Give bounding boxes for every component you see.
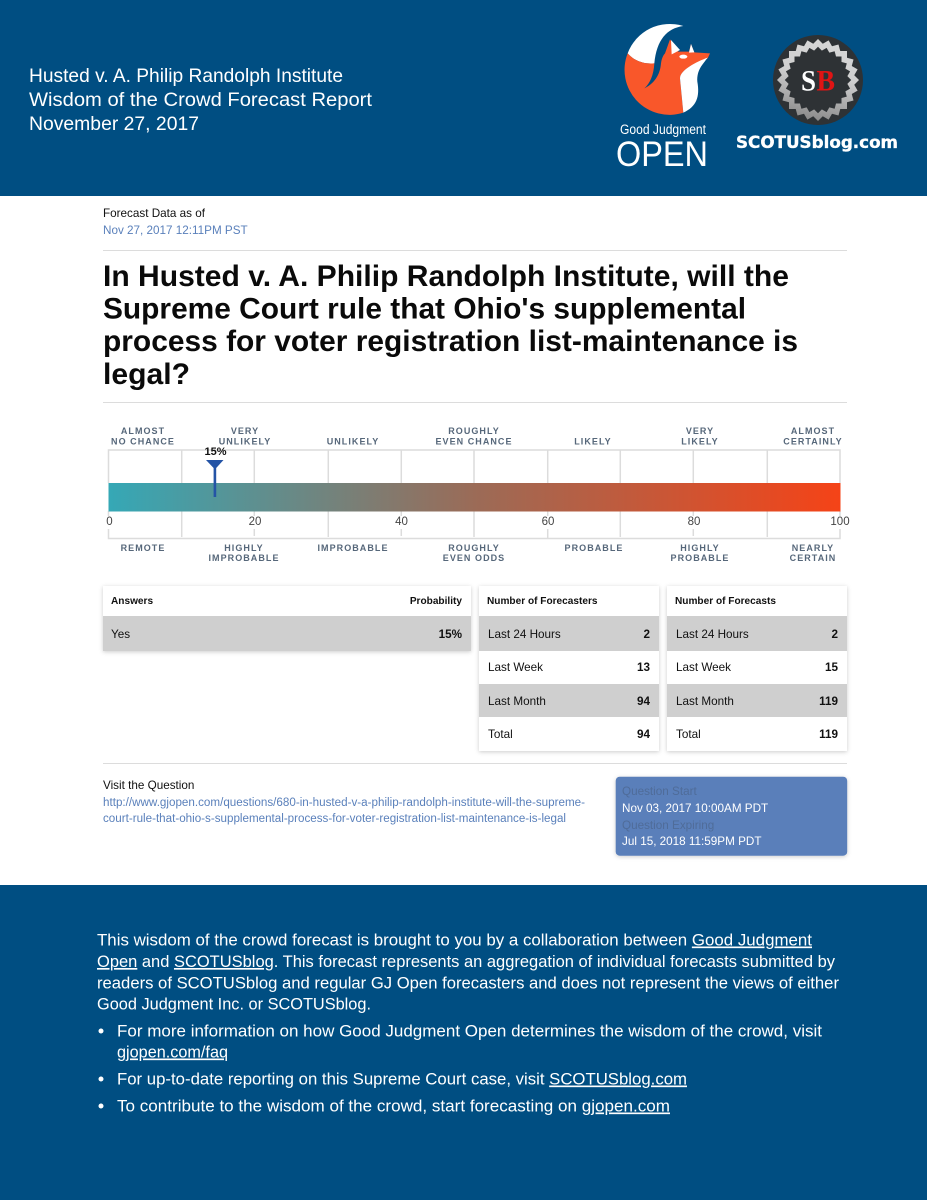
table: number of forecasters: Last 24 Hours bbox=[488, 628, 561, 641]
table: number of forecasts: Last Week bbox=[676, 661, 731, 674]
logo: SCOTUSblog seal bbox=[736, 32, 898, 153]
table: answers: Yes bbox=[111, 628, 130, 641]
forecast date block bbox=[103, 207, 248, 237]
scale numbers: 0 bbox=[106, 516, 113, 528]
header title text bbox=[29, 66, 373, 135]
gauge upper labels: LIKELY bbox=[681, 436, 719, 446]
gauge lower labels: HIGHLY bbox=[224, 543, 264, 553]
table: number of forecasts: 2 bbox=[831, 628, 838, 641]
scale numbers: 40 bbox=[395, 516, 408, 528]
table: number of forecasts bbox=[667, 586, 847, 751]
table: number of forecasters: Number of Forecasters bbox=[487, 596, 598, 607]
scale numbers: 100 bbox=[830, 516, 850, 528]
table: answers: Answers bbox=[111, 596, 153, 607]
question link block: court-rule-that-ohio-s-supplemental-process-for-voter-registration-list-maintenance-is-legal bbox=[103, 813, 566, 825]
gauge upper labels bbox=[111, 426, 843, 446]
table: number of forecasts: 15 bbox=[825, 661, 838, 674]
logo: Good Judgment Open fox bbox=[616, 24, 710, 174]
panel: question dates: Question Expiring bbox=[622, 819, 714, 832]
header title text: November 27, 2017 bbox=[29, 114, 199, 135]
panel: header banner bbox=[0, 0, 927, 196]
question link block: Visit the Question bbox=[103, 779, 194, 792]
logo: SCOTUSblog seal: S bbox=[801, 64, 816, 98]
footer bullet list: To contribute to the wisdom of the crowd, start forecasting on gjopen.com bbox=[117, 1096, 670, 1116]
gauge lower labels: REMOTE bbox=[121, 543, 165, 553]
marker: 15%: 15% bbox=[204, 446, 227, 458]
panel: question dates: Jul 15, 2018 11:59PM PDT bbox=[622, 835, 761, 848]
question heading: process for voter registration list-maintenance is bbox=[103, 325, 798, 358]
gauge lower labels: NEARLY bbox=[792, 543, 834, 553]
table: number of forecasters: Total bbox=[488, 728, 513, 741]
forecast date block: Nov 27, 2017 12:11PM PST bbox=[103, 224, 248, 237]
gauge lower labels: ROUGHLY bbox=[448, 543, 500, 553]
gauge lower labels: IMPROBABLE bbox=[318, 543, 388, 553]
logo: SCOTUSblog seal: B bbox=[816, 64, 835, 98]
panel: footer bbox=[0, 885, 927, 1200]
table: number of forecasters: 94 bbox=[637, 728, 650, 741]
scale numbers: 80 bbox=[688, 516, 700, 528]
gauge upper labels: ROUGHLY bbox=[448, 426, 500, 436]
chart: probability gauge bbox=[102, 426, 852, 563]
table: number of forecasts: Last Month bbox=[676, 695, 734, 708]
gauge upper labels: VERY bbox=[231, 426, 259, 436]
scale numbers: 20 bbox=[249, 516, 261, 528]
gauge upper labels: LIKELY bbox=[574, 436, 612, 446]
table: number of forecasters: Last Week bbox=[488, 661, 543, 674]
panel: question dates bbox=[616, 777, 847, 856]
gauge lower labels: PROBABLE bbox=[565, 543, 623, 553]
footer paragraph: This wisdom of the crowd forecast is brought to you by a collaboration between Good Judgment bbox=[97, 930, 812, 950]
gauge upper labels: ALMOST bbox=[121, 426, 165, 436]
panel: question dates: Nov 03, 2017 10:00AM PDT bbox=[622, 802, 768, 815]
table: answers bbox=[103, 586, 471, 651]
table: number of forecasts: 119 bbox=[819, 695, 838, 708]
table: number of forecasts: Number of Forecasts bbox=[675, 596, 776, 607]
panel: question dates: Question Start bbox=[622, 785, 697, 798]
footer bullet list bbox=[98, 1022, 822, 1116]
gauge upper labels: NO CHANCE bbox=[111, 436, 175, 446]
table: answers: 15% bbox=[439, 628, 463, 641]
gauge lower labels: PROBABLE bbox=[671, 553, 729, 563]
header title text: Husted v. A. Philip Randolph Institute bbox=[29, 66, 343, 87]
gauge lower labels: EVEN ODDS bbox=[443, 553, 505, 563]
footer paragraph: Open and SCOTUSblog. This forecast represents an aggregation of individual forecasts submitted by bbox=[97, 952, 836, 971]
table: number of forecasts: 119 bbox=[819, 728, 838, 741]
header title text: Wisdom of the Crowd Forecast Report bbox=[29, 90, 373, 111]
gradient bar bbox=[108, 483, 840, 512]
scale numbers bbox=[102, 516, 852, 529]
gauge lower labels: IMPROBABLE bbox=[208, 553, 280, 563]
footer paragraph: Good Judgment Inc. or SCOTUSblog. bbox=[97, 994, 371, 1014]
scale numbers: 60 bbox=[542, 516, 554, 528]
table: number of forecasters: Last Month bbox=[488, 695, 546, 708]
logo: Good Judgment Open fox: Good Judgment bbox=[620, 122, 706, 137]
footer bullet list: For up-to-date reporting on this Supreme Court case, visit SCOTUSblog.com bbox=[117, 1070, 687, 1088]
table: number of forecasts: Total bbox=[676, 728, 701, 741]
gauge upper labels: UNLIKELY bbox=[219, 436, 271, 446]
gauge upper labels: CERTAINLY bbox=[783, 436, 843, 446]
gauge upper labels: VERY bbox=[686, 426, 714, 436]
marker: 15% bbox=[204, 446, 227, 497]
gauge upper labels: ALMOST bbox=[791, 426, 835, 436]
question heading: In Husted v. A. Philip Randolph Institute, will the bbox=[103, 260, 789, 293]
table: number of forecasts: Last 24 Hours bbox=[676, 628, 749, 641]
question link block: http://www.gjopen.com/questions/680-in-husted-v-a-philip-randolph-institute-will-the-supreme- bbox=[103, 797, 585, 809]
gauge upper labels: UNLIKELY bbox=[327, 436, 379, 446]
forecast date block: Forecast Data as of bbox=[103, 207, 206, 220]
footer paragraph bbox=[97, 930, 839, 1014]
gauge upper labels: EVEN CHANCE bbox=[435, 436, 513, 446]
footer bullet list: gjopen.com/faq bbox=[117, 1042, 228, 1062]
footer paragraph: readers of SCOTUSblog and regular GJ Open forecasters and does not represent the views of either bbox=[97, 974, 839, 992]
gauge lower labels: HIGHLY bbox=[680, 543, 720, 553]
question link block bbox=[103, 779, 585, 825]
logo: Good Judgment Open fox: OPEN bbox=[616, 135, 708, 174]
table: number of forecasters bbox=[479, 586, 659, 751]
question heading bbox=[103, 260, 798, 391]
table: number of forecasters: 13 bbox=[637, 661, 650, 674]
gauge lower labels: CERTAIN bbox=[790, 553, 836, 563]
footer bullet list: For more information on how Good Judgment Open determines the wisdom of the crowd, visit bbox=[117, 1022, 822, 1040]
table: number of forecasters: 2 bbox=[643, 628, 650, 641]
table: number of forecasters: 94 bbox=[637, 695, 650, 708]
question heading: Supreme Court rule that Ohio's supplemental bbox=[103, 292, 746, 326]
question heading: legal? bbox=[103, 358, 190, 391]
table: answers: Probability bbox=[410, 596, 462, 607]
logo: SCOTUSblog seal: SCOTUSblog.com bbox=[736, 133, 898, 153]
gauge lower labels bbox=[121, 543, 836, 563]
